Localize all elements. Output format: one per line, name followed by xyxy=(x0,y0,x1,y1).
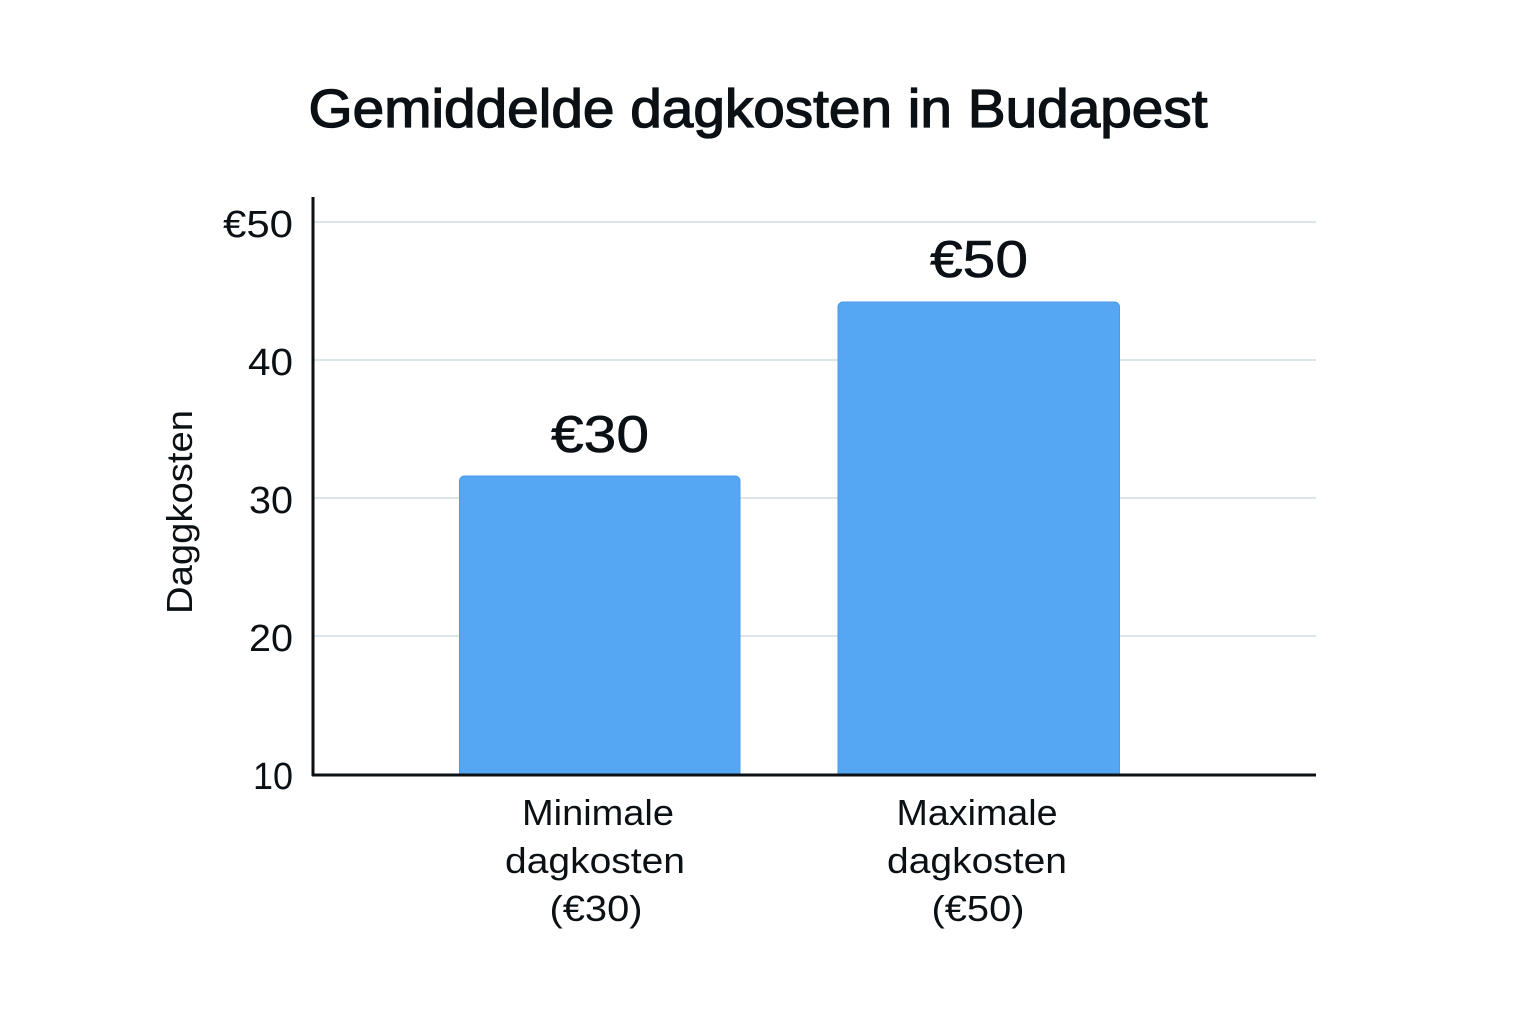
y axis tick labels xyxy=(223,204,293,798)
category label: maximale dagkosten: Maximale xyxy=(896,792,1058,833)
category label: maximale dagkosten: dagkosten xyxy=(887,840,1067,881)
y axis title: Daggkosten xyxy=(159,410,200,614)
y axis tick labels: 10 xyxy=(253,756,293,798)
bar value label: €50: €50 xyxy=(930,231,1028,289)
category label: minimale dagkosten: (€30) xyxy=(550,888,642,929)
category label: maximale dagkosten: (€50) xyxy=(932,888,1024,929)
y axis tick labels: €50 xyxy=(223,204,293,246)
category label: minimale dagkosten: Minimale xyxy=(522,792,674,833)
y axis tick labels: 20 xyxy=(249,618,293,660)
category label: minimale dagkosten xyxy=(505,792,685,929)
bar value label: €30: €30 xyxy=(551,406,649,464)
category label: maximale dagkosten xyxy=(887,792,1067,929)
title: Gemiddelde dagkosten in Budapest xyxy=(308,79,1208,139)
bar: minimale dagkosten xyxy=(460,476,740,775)
bar: maximale dagkosten xyxy=(838,302,1120,775)
category label: minimale dagkosten: dagkosten xyxy=(505,840,685,881)
axes xyxy=(312,197,1316,776)
y axis tick labels: 30 xyxy=(249,480,293,522)
y axis tick labels: 40 xyxy=(248,342,293,384)
